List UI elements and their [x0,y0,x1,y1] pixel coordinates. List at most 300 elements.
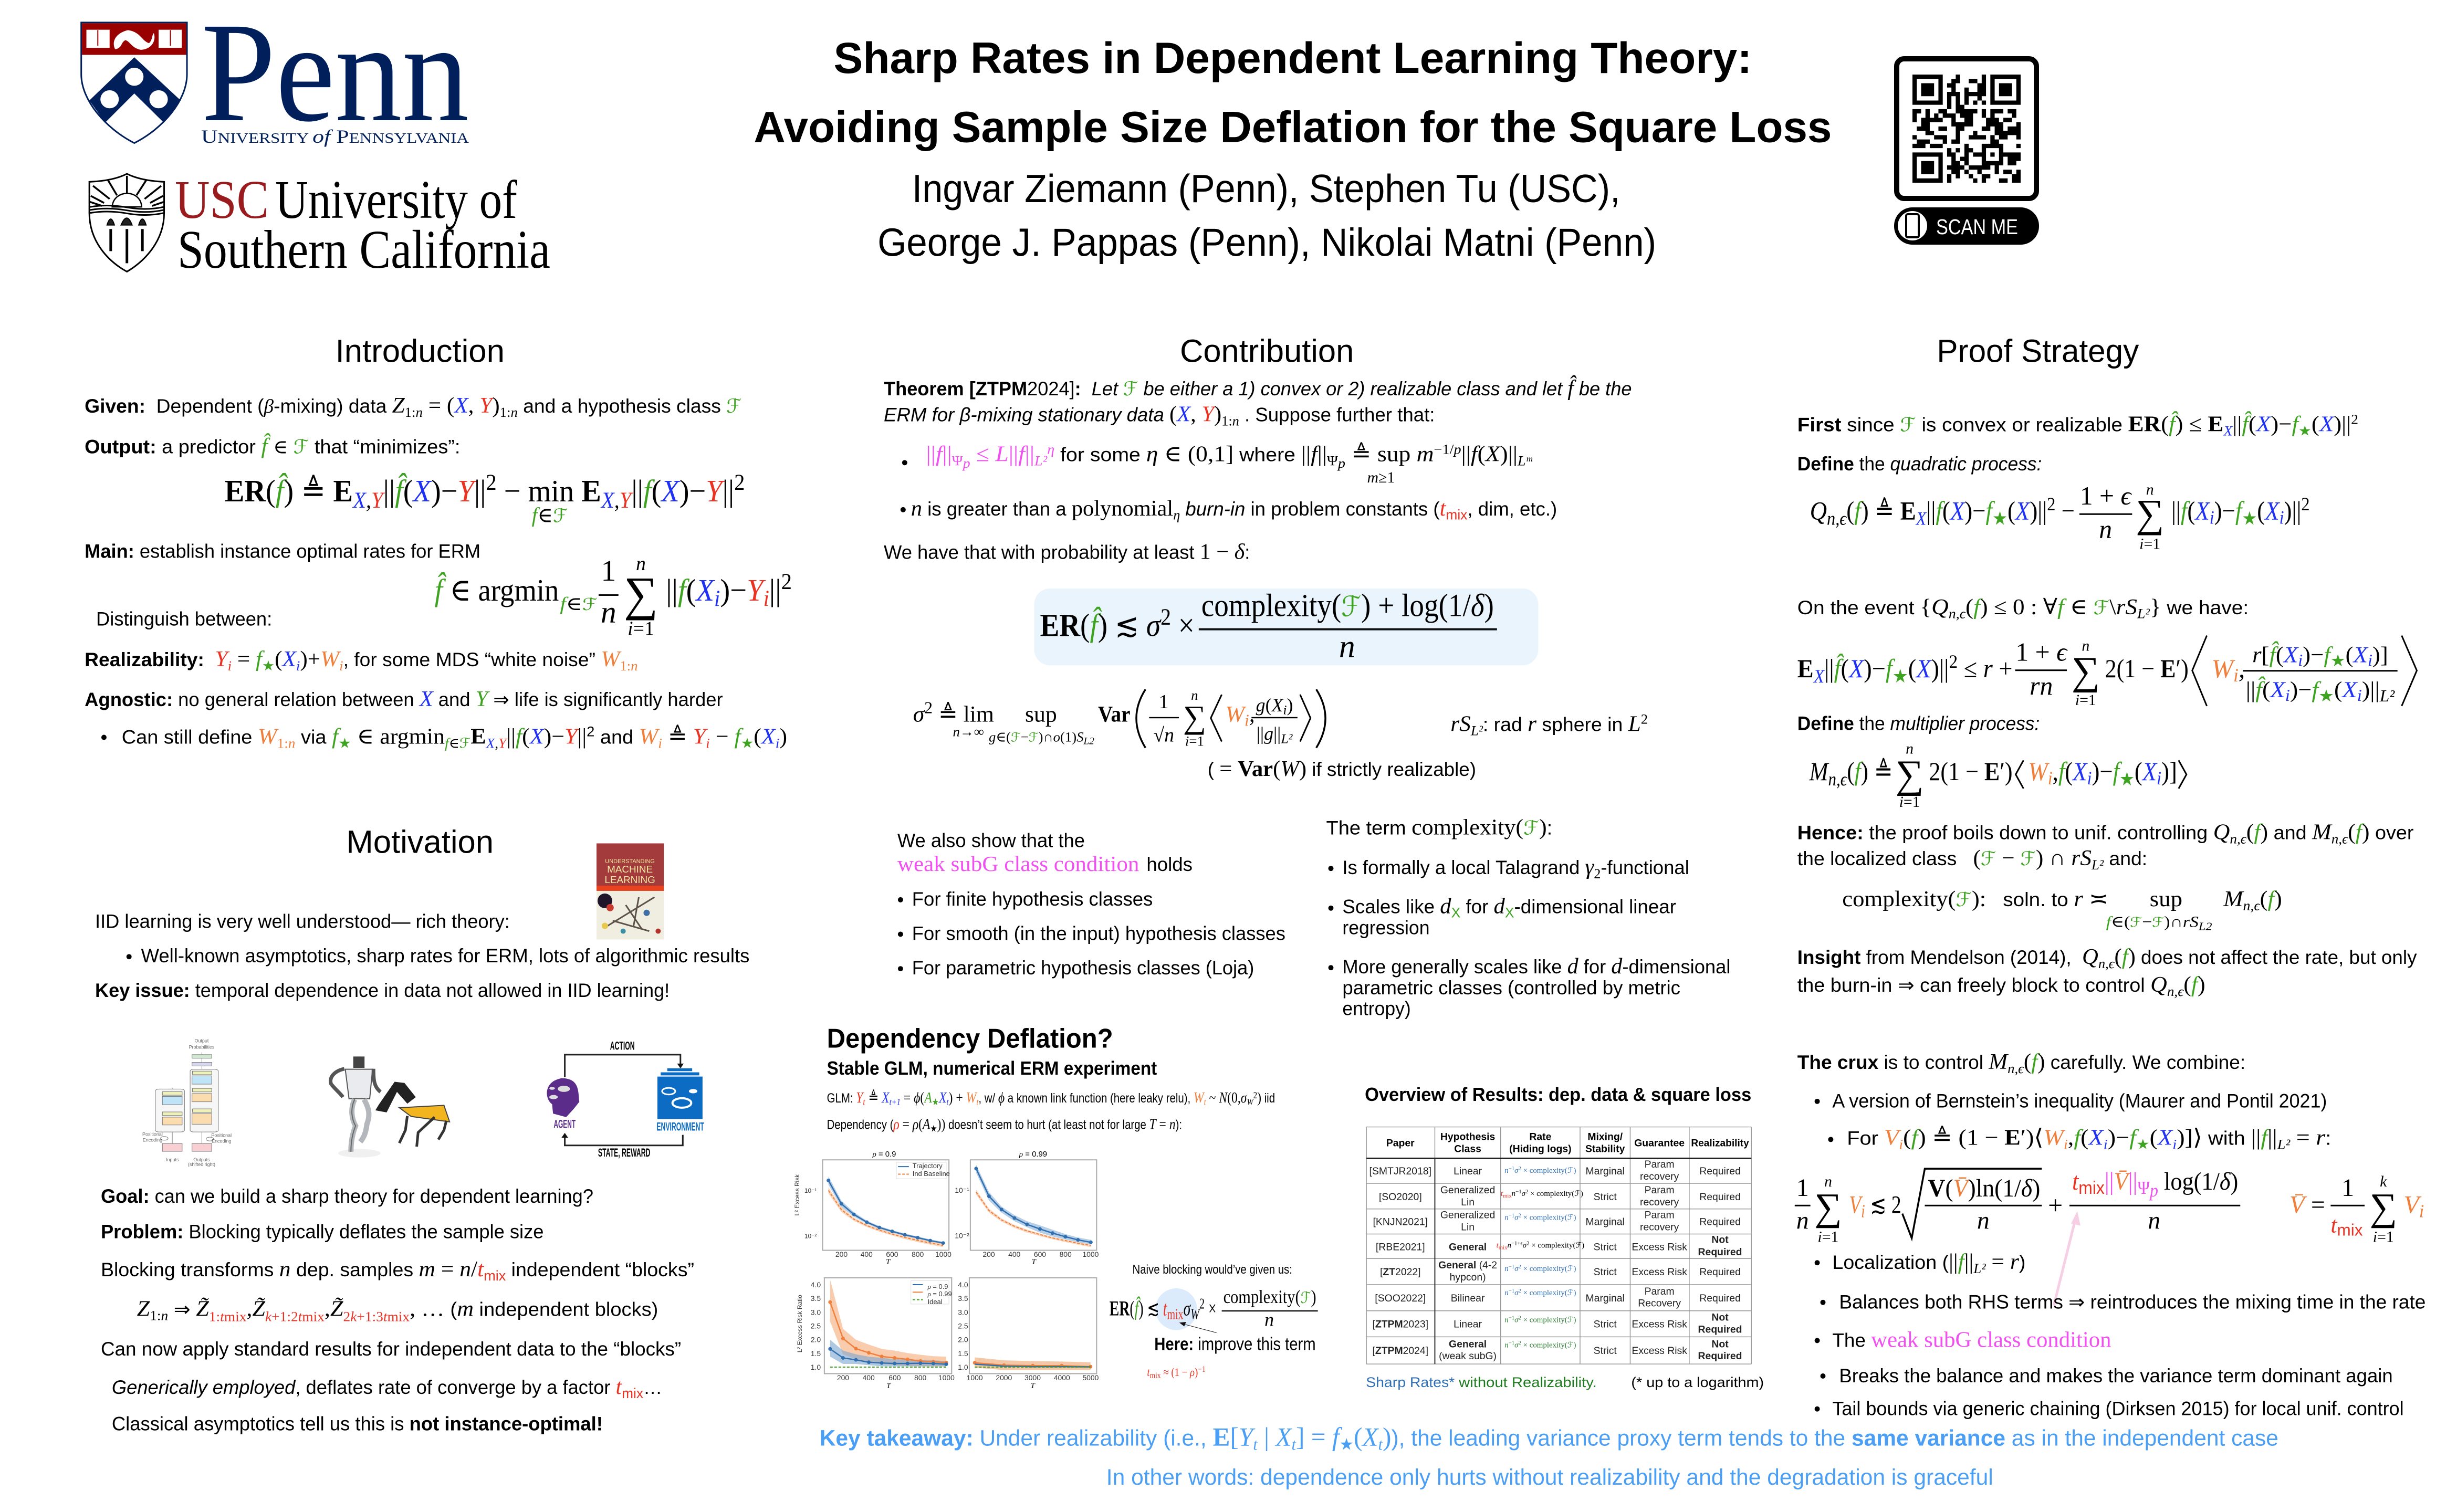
event: we have: [2167,597,2244,618]
equation: expected loss bound: i=1 [2075,691,2096,709]
equation: ERM: 1 [601,554,616,587]
line chart: excess risk, rho 0.9: L² Excess Risk [793,1174,801,1216]
panel: goal and blocking: mix [484,1268,506,1284]
equation: Bernstein bound: V [2404,1191,2419,1219]
equation: variance proxy: i [1283,702,1287,718]
equation: variance proxy: n [1191,687,1198,703]
equation: ERM: n [601,595,616,629]
bullet: V definition: f) ≜ (1 − E′)⟨W [1911,1125,2062,1150]
table: overview of results: t [1497,1241,1499,1250]
bullet: localization [1815,1250,2025,1276]
equation: Q: 1 + ϵ [2080,481,2132,510]
equation: variance proxy: ≜ lim [933,702,994,727]
panel: goal and blocking: independent “blocks” [506,1259,694,1280]
equation: blocks: , [246,1297,252,1321]
equation: excess risk: 2 [486,470,497,495]
equation: ERM: i [714,586,720,611]
callout: main bound: × [1171,608,1195,644]
QR code with scan me badge [1894,59,2039,245]
equation: Bernstein bound: + [2048,1191,2063,1220]
table: overview of results: Hypothesis [1440,1131,1495,1142]
bullet: weak subG condition [902,441,1532,486]
output: Output: a predictor f̂ ∈ ℱ that “minimizes”: [85,433,460,458]
image: book cover: MACHINE [607,864,653,875]
table: overview of results: σ [1514,1265,1519,1273]
line chart: excess risk, rho 0.9: 1000 [935,1250,952,1258]
logo: Penn [81,0,469,151]
bullet: weak subG condition: p [1452,441,1461,457]
line chart: excess risk ratio, long horizon [958,1278,1099,1390]
equation: variance proxy: Var [1098,702,1131,727]
line chart: excess risk ratio, short horizon: L² Excess Risk Ratio [796,1295,803,1352]
equation: excess risk: − min [497,474,581,508]
bullet: burn-in: , dim, etc.) [1467,498,1557,520]
table: overview of results: Required [1698,1350,1742,1362]
equation: blocks: , [325,1297,330,1321]
equation: variance proxy: ||g|| [1257,723,1281,744]
table: overview of results: mix [1503,1193,1512,1199]
equation: Q: 2 [2301,494,2310,514]
equation: excess risk: ,Y [614,488,632,513]
equation: expected loss bound: r + [1983,654,2014,683]
table: overview of results: Rate [1529,1131,1552,1142]
table: overview of results: Bilinear [1451,1293,1485,1304]
table: overview of results: [ZTPM2024] [1372,1345,1428,1357]
panel: motivation text [95,911,749,1001]
table: overview of results: σ [1514,1341,1519,1349]
table: overview of results: mix [1499,1244,1508,1251]
bullet: weak subG condition: −1/ [1434,441,1454,457]
caption: sharp rates: Sharp Rates* [1366,1374,1455,1390]
panel: motivation text: Well-known asymptotics, sharp rates for ERM, lots of algorithmic results [141,945,749,967]
equation: M: X [2141,757,2158,786]
callout: naive blocking: ρ) [1190,1366,1198,1379]
panel: complexity term: X [1505,905,1514,921]
given: ℱ [726,395,741,417]
first step: ( [2312,412,2319,437]
line chart: excess risk ratio, long horizon: 2.0 [958,1335,968,1343]
table: overview of results: 2 [1519,1166,1521,1172]
equation: Bernstein bound: mix [2337,1220,2363,1239]
equation: Bernstein bound: i=1 [1817,1228,1838,1245]
panel: complexity term: -functional [1601,857,1689,878]
panel: proof strategy: n,ϵ [2167,983,2184,999]
equation: Bernstein bound: Ψ [2137,1178,2150,1198]
equation: variance proxy: g∈(ℱ−ℱ)∩o(1)S [989,729,1084,744]
equation: blocks: Z [137,1297,150,1321]
bullet: V definition: = [2290,1125,2316,1150]
heading: overview of results: Overview of Results: dep. data & square loss [1365,1084,1751,1105]
line chart: excess risk ratio, short horizon: Ideal [928,1298,943,1306]
line chart: excess risk ratio, short horizon: 3.0 [811,1308,821,1317]
hence: n,ϵ [2331,831,2348,846]
bullet: still define: Y [693,724,708,749]
callout: naive blocking: t [1147,1366,1150,1379]
equation: expected loss bound: rn [2030,671,2053,700]
arrow: improve this term [1180,1322,1217,1332]
image: transformer diagram: Positional [211,1132,232,1138]
given: X, Y) [454,393,499,418]
table: overview of results: Param [1645,1159,1675,1170]
bullet: V definition: i [2104,1136,2108,1152]
table: overview of results: Required [1699,1293,1741,1304]
bullet: still define: ★ [741,735,754,751]
table: overview of results: × complexity(ℱ) [1523,1288,1576,1297]
equation: variance proxy: sup [1025,702,1057,727]
table: overview of results: n [1504,1167,1509,1175]
given: Given: Dependent (β-mixing) data Z [85,393,404,418]
bullet: weak subG condition: p [961,455,970,471]
equation: complexity definition [1842,887,2282,933]
key takeaway [820,1422,2278,1490]
equation: expected loss bound: ∑ [2072,649,2100,693]
glm definition: 2 [1253,1090,1257,1100]
table: overview of results: Not [1711,1234,1729,1245]
bullet: V definition: i [2064,1136,2068,1152]
callout: naive blocking: mix [1167,1306,1184,1323]
key takeaway: ] = [1296,1422,1332,1451]
image: agent environment loop: ACTION [610,1039,635,1052]
bullet: balances: Balances both RHS terms ⇒ reintroduces the mixing time in the rate [1839,1292,2425,1313]
line chart: excess risk, rho 0.99: 400 [1008,1250,1021,1258]
equation: expected loss bound: , [2239,654,2245,683]
table: overview of results: 2 [1519,1340,1521,1346]
table: overview of results: recovery [1640,1196,1679,1208]
bullet: still define: ,Y [495,735,506,751]
panel: motivation text: Key issue: temporal dependence in data not allowed in IID learning! [95,980,670,1001]
equation: complexity definition: ( [2260,887,2267,911]
callout: naive blocking: complexity(ℱ) [1224,1286,1316,1307]
panel: subG holds [897,830,1285,979]
equation: Q: f(X)−f [1936,497,1993,526]
equation: Q: X [1915,508,1927,529]
hence: n,ϵ [2230,831,2247,846]
panel: complexity term: Scales like d [1342,894,1451,919]
bullet: burn-in: in problem constants (t [1251,496,1446,521]
key takeaway: X [1361,1422,1379,1451]
realizability: i [296,658,300,674]
equation: Bernstein bound: log(1/ [2158,1168,2220,1195]
dependency note: Dependency (ρ = ρ(A [827,1116,932,1133]
line chart: excess risk ratio, long horizon: 1.5 [958,1349,968,1358]
panel: goal and blocking: Goal: can we build a sharp theory for dependent learning? [101,1185,593,1207]
line chart: excess risk ratio, long horizon: 2000 [996,1373,1012,1382]
image: transformer diagram: Outputs [193,1157,210,1162]
equation: blocks: (m independent blocks) [450,1297,652,1321]
bullet: burn-in: burn-in [1180,498,1245,520]
table: overview of results: Stability [1585,1143,1625,1154]
bullet: weak subG condition: Ψ [952,453,963,468]
line chart: excess risk ratio, short horizon: 4.0 [811,1280,821,1289]
equation: Q: n [2146,481,2154,498]
table: overview of results: 2 [1527,1240,1530,1246]
table: overview of results: Strict [1594,1319,1617,1330]
equation: variance proxy: L² [1280,731,1293,746]
bullet: still define: ∈ℱ [449,735,471,751]
event: n,ϵ [1949,606,1966,622]
multiplier process: Define the multiplier process: [1797,713,2040,734]
image: agent environment loop: STATE, REWARD [598,1146,650,1159]
callout: naive blocking: n [1264,1309,1274,1330]
bullet: still define: i [658,735,662,751]
bullet: burn-in: n is greater than a polynomial [911,496,1174,521]
bullet: V definition: ( [2150,1125,2158,1150]
callout: naive blocking: 2 [1199,1296,1205,1312]
table: overview of results: Linear [1454,1166,1482,1177]
equation: Q: X [2264,497,2280,526]
table: overview of results: 2 [1525,1189,1528,1195]
table: overview of results: Marginal [1586,1166,1625,1177]
equation: excess risk: E [581,474,601,508]
bullet: weak subG condition: Lᵐ [1517,453,1532,468]
caption: sharp rates [1366,1374,1764,1390]
callout: naive blocking: W [1190,1306,1200,1323]
bullet: weak subG condition: η ∈ (0,1] where ||f|| [1146,442,1326,466]
equation: M: )− [2092,757,2113,786]
equation: ERM: i [764,586,769,611]
image: humanoid and quadruped robots [331,1056,449,1158]
equation: expected loss bound: ( [2346,642,2354,667]
callout: naive blocking: −1 [1198,1365,1206,1374]
equation: ERM: ∑ [624,567,658,621]
heading: Contribution: Contribution [1180,333,1354,369]
logo: USC [89,170,550,280]
table: overview of results: σ [1523,1241,1527,1250]
equation: excess risk: || [631,474,643,508]
panel: subG holds: For smooth (in the input) hypothesis classes [912,922,1285,944]
table: overview of results: (weak subG) [1439,1350,1497,1362]
equation: Bernstein bound: ∑ [1814,1185,1842,1228]
equation: Q: ||f(X [2171,497,2211,526]
image: transformer diagram: Inputs [166,1157,179,1162]
equation: expected loss bound: r[f̂(X [2252,642,2298,667]
equation: Q: ★ [2242,508,2257,529]
equation: expected loss bound: L² [2379,687,2395,705]
table: overview of results [1366,1127,1751,1364]
panel: complexity term: parametric classes (controlled by metric [1342,977,1680,999]
glm definition: ~ [1206,1089,1219,1106]
bullet: still define: f [735,724,744,749]
equation: M: ( [1847,757,1855,786]
table: overview of results: Lin [1461,1222,1475,1233]
equation: blocks: 1:n [150,1308,168,1324]
image: agent environment loop: AGENT [553,1118,576,1131]
equation: expected loss bound: 1 + ϵ [2015,637,2068,666]
equation: excess risk: X [352,488,367,513]
line chart: excess risk, rho 0.9: Ind Baseline [913,1170,950,1178]
key takeaway: X [1274,1422,1292,1451]
image: book cover: LEARNING [604,875,655,886]
bullet: still define [101,724,787,751]
equation: variance proxy: i=1 [1185,733,1204,749]
bullet: weak subG condition: Ψ [1327,453,1338,468]
line chart: excess risk ratio, short horizon: T [886,1382,892,1390]
table: overview of results: Linear [1454,1319,1482,1330]
bullet: localization: r) [2010,1250,2025,1274]
bullet: still define: f [445,735,451,751]
line chart: excess risk, rho 0.99: 600 [1034,1250,1046,1258]
table: overview of results: n [1504,1341,1509,1349]
bullet: burn-in: η [1173,507,1180,523]
panel: complexity term: X [1451,905,1461,921]
panel: complexity term: entropy) [1342,998,1411,1020]
table: overview of results: Required [1699,1216,1741,1228]
equation: excess risk: ,Y [366,488,384,513]
line chart: excess risk, rho 0.99: 800 [1060,1250,1072,1258]
equation: Q: i [2210,507,2214,528]
table: overview of results: −1 [1509,1315,1514,1321]
glm definition: t [976,1097,979,1107]
key takeaway: ★ [1340,1435,1354,1453]
panel: subG holds: weak subG class condition [897,852,1139,876]
equation: M: W [2028,757,2050,786]
bullet: still define: 2 [587,724,594,740]
table: overview of results: n [1504,1316,1509,1325]
callout: naive blocking: ER(f̂) ≲ t [1110,1297,1169,1320]
table: overview of results: σ [1514,1214,1519,1222]
panel: proof strategy: and: [2104,848,2147,869]
panel: introduction [85,393,792,751]
panel: complexity term: Is formally a local Talagrand γ [1342,855,1594,879]
bullet: still define: i [706,735,710,751]
key takeaway: t [1291,1435,1297,1453]
authors: George J. Pappas (Penn), Nikolai Matni (Penn) [877,220,1656,265]
table: overview of results: σ [1514,1167,1519,1175]
equation: Q: )− [2214,497,2235,526]
equation: Bernstein bound: || [2105,1168,2114,1195]
line chart: excess risk ratio, long horizon: 4.0 [958,1280,968,1289]
insight: ( [2114,944,2122,969]
table: overview of results: Strict [1594,1266,1617,1278]
bullet: still define: ∈ argmin [351,724,445,749]
panel: subG holds: We also show that the [897,830,1085,851]
equation: blocks: ⇒ [168,1299,196,1320]
bullet: V definition: X [2157,1125,2173,1150]
line chart: excess risk, rho 0.9: 600 [886,1250,898,1258]
first step: || [2232,412,2242,437]
equation: variance proxy: L2 [1083,736,1094,747]
equation: ERM [435,553,792,640]
equation: Bernstein bound: V̄|| [2114,1168,2138,1195]
line chart: excess risk ratio, long horizon: 4000 [1054,1373,1070,1382]
panel: proof strategy [1795,411,2425,1420]
panel: proof strategy: the localized class (ℱ − ℱ) ∩ rS [1797,846,2091,870]
equation: Bernstein bound: k [2380,1173,2387,1190]
table: overview of results: −1 [1509,1264,1514,1270]
caption: sharp rates: (* up to a logarithm) [1631,1374,1764,1390]
dependency note: doesn’t seem to hurt (at least not for large T = n): [949,1116,1190,1133]
table: overview of results: Not [1711,1312,1729,1324]
table: overview of results: × complexity(ℱ) [1523,1213,1576,1222]
glm definition: ϕ(A [914,1089,934,1106]
equation: ERM: f̂ ∈ argmin [435,572,559,607]
equation: blocks: Z̃ [330,1297,344,1321]
table: overview of results: Strict [1594,1241,1617,1253]
quadratic process: Define the quadratic process: [1797,453,2042,475]
line chart: excess risk ratio, short horizon: 1.0 [811,1363,821,1371]
table: overview of results: −1 [1509,1213,1514,1219]
heading: Motivation: Motivation [346,824,494,860]
given: 1:n [500,404,518,420]
first step: f̂(X)−f [2242,412,2298,437]
equation: Q: 2 [2047,494,2055,514]
bullet: V definition [1828,1125,2331,1152]
table: overview of results: Excess Risk [1632,1241,1687,1253]
panel: goal and blocking: Blocking transforms n dep. samples m = n/t [101,1257,484,1282]
bullet: still define: f [332,724,341,749]
equation: M: f) ≜ [1855,757,1898,786]
equation: M [1809,740,2187,811]
table: overview of results: n [1504,1214,1509,1222]
panel: dependency deflation [827,1023,1275,1134]
callout: naive blocking: ≈ (1 − [1161,1366,1190,1379]
equation: Bernstein bound: t [2330,1212,2337,1237]
equation: excess risk: f∈ℱ [532,504,568,527]
panel: subG holds: For finite hypothesis classes [912,888,1153,910]
glm definition: ≜ [865,1089,882,1106]
equation: Bernstein bound: 1 [2341,1174,2354,1202]
table: overview of results: 2 [1519,1264,1521,1270]
equation: M: )] [2161,757,2177,786]
table: overview of results: [KNJN2021] [1373,1216,1428,1228]
hence: ( [2246,820,2254,844]
equation: variance proxy: , [1249,702,1255,727]
bullet: weak subG condition: η [1047,441,1054,457]
bullet: still define: E [471,724,486,749]
table: overview of results: Excess Risk [1632,1319,1687,1330]
table: overview of results: Param [1645,1184,1675,1196]
table: overview of results: Strict [1594,1191,1617,1203]
first step: X [2223,423,2233,439]
bullet: still define: || [506,724,516,749]
bullet: still define: ★ [338,735,351,751]
table: overview of results: Param [1645,1286,1675,1297]
equation: excess risk [225,470,745,527]
dependency note: ★ [930,1124,937,1134]
image: agent environment loop: ENVIRONMENT [656,1120,704,1133]
heading: Dependency Deflation? [827,1023,1113,1053]
equation: Bernstein bound: mix [2078,1178,2105,1198]
bullet: weak subG condition: p [1337,455,1345,471]
line chart: excess risk ratio, long horizon: 3.5 [958,1294,968,1303]
line chart: excess risk ratio, long horizon: 3.0 [958,1308,968,1317]
first step: First since ℱ is convex or realizable ER(f̂) ≤ E [1797,412,2223,437]
hence: f) and M [2254,820,2331,844]
equation: M: f(X [2058,757,2089,786]
line chart: excess risk ratio, short horizon: 2.5 [811,1322,821,1330]
line chart: excess risk, rho 0.99: 1000 [1082,1250,1099,1258]
bullet: V definition: For V [1847,1125,1898,1150]
bullet: weak subG condition: for some [1054,444,1146,465]
table: overview of results: × complexity(ℱ) [1530,1189,1583,1198]
bullet: still define: via [295,726,332,748]
glm definition: ) [1257,1089,1261,1106]
equation: expected loss bound: n [2082,637,2089,654]
panel: proof strategy: f) [2191,972,2205,997]
agnostic: Agnostic: no general relation between X and Y ⇒ life is significantly harder [85,687,723,711]
caption: sharp rates: without Realizability. [1458,1374,1597,1390]
equation: blocks: , … [410,1297,450,1321]
equation: expected loss bound: f̂(X)−f [1834,654,1893,683]
panel: theorem [884,375,1632,564]
table: overview of results: σ [1514,1289,1519,1297]
equation: Bernstein bound: V [1849,1191,1863,1219]
panel: theorem: . Suppose further that: [1239,404,1435,426]
bullet: still define: − [710,724,735,749]
table: overview of results: −1 [1509,1288,1514,1294]
equation: Q: ★ [1992,508,2008,529]
line chart: excess risk, rho 0.9 [793,1150,952,1266]
